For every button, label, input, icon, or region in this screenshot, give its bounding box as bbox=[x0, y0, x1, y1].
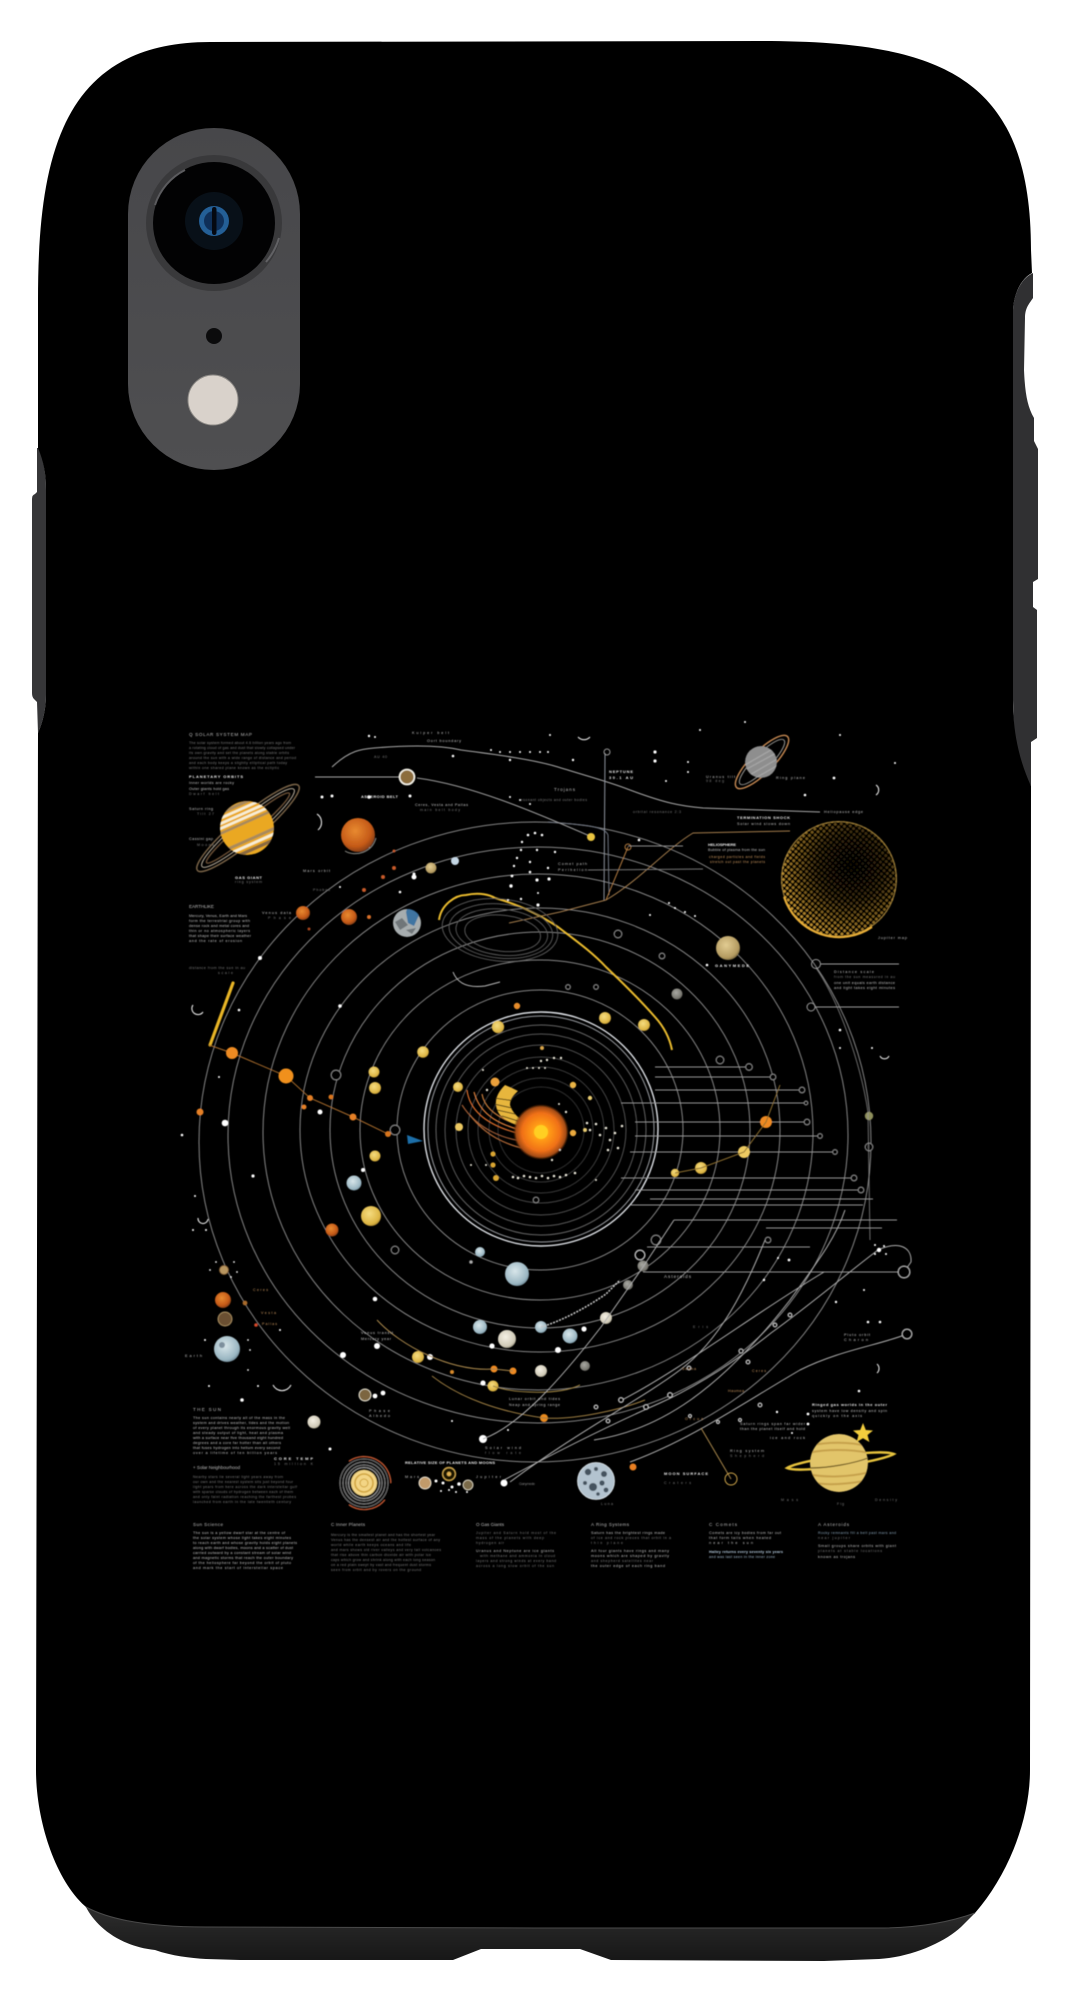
upper right block: GANYMEDE bbox=[715, 963, 749, 968]
lower left text block: + Solar Neighbourhood bbox=[193, 1465, 240, 1470]
bottom column 5 bbox=[709, 1522, 783, 1559]
lower labels bbox=[185, 1274, 897, 1506]
top centre labels: Uranus tilt bbox=[706, 775, 736, 779]
intro paragraph: within one shared plane known as the ecliptic bbox=[189, 766, 279, 770]
lower labels: Orcus bbox=[685, 1417, 703, 1421]
large halftone planet bbox=[780, 820, 898, 940]
lower labels: Lunar orbit and tides bbox=[509, 1397, 560, 1401]
top centre labels: orbital resonance 2:3 bbox=[633, 810, 681, 814]
lower left text block: THE SUN bbox=[193, 1407, 221, 1412]
lower labels: Sedna bbox=[682, 1367, 696, 1371]
bottom column 1: and mark the start of interstellar space bbox=[193, 1566, 283, 1570]
label: intro text block bbox=[189, 732, 296, 796]
solar core bbox=[534, 1125, 548, 1139]
lower labels: system have low density and spin bbox=[812, 1409, 887, 1413]
lower left text block: degrees and a core far hotter than all others bbox=[193, 1441, 281, 1445]
bottom column 3 bbox=[476, 1522, 556, 1568]
right callout block: Distance scale bbox=[834, 970, 874, 974]
bottom column 1: and magnetic storms that reach the outer boundary bbox=[193, 1556, 293, 1560]
side labels near gold planet: GAS GIANT bbox=[235, 875, 263, 880]
intro paragraph: around the sun with a wide range of distance and period bbox=[189, 756, 296, 760]
lower labels: Fig bbox=[837, 1502, 844, 1506]
bottom pale planet row bbox=[308, 1312, 636, 1470]
secondary paragraph: Dwarf belt bbox=[189, 792, 219, 796]
bottom column 5: C Comets bbox=[709, 1522, 738, 1527]
lower labels: than the planet itself and hold bbox=[740, 1427, 805, 1431]
yellow comet arc bbox=[439, 894, 672, 1050]
lower left text block: and only faint radiation reaching the farthest probes bbox=[193, 1495, 296, 1499]
lower labels: Mass bbox=[781, 1498, 798, 1502]
lower labels: Venus transit bbox=[361, 1331, 394, 1335]
lower left text block: launched from earth in the late twentieth century bbox=[193, 1500, 291, 1504]
lower left text block: our own and the nearest system sits just beyond four bbox=[193, 1480, 294, 1484]
secondary paragraph: PLANETARY ORBITS bbox=[189, 774, 243, 779]
intro paragraph bbox=[189, 741, 296, 770]
lower labels: quickly on the axis bbox=[812, 1414, 862, 1418]
lower left text block bbox=[193, 1407, 314, 1504]
lower left text block: Nearby stars lie several light years away from bbox=[193, 1475, 283, 1479]
lower left text block: over a lifetime of ten billion years bbox=[193, 1451, 277, 1455]
camera pill housing bbox=[128, 128, 300, 470]
grey-olive worlds bbox=[326, 988, 873, 1290]
lower left text block: system and drives weather, tides and the motion bbox=[193, 1421, 289, 1425]
intro paragraph: The solar system formed about 4.6 billion years ago from bbox=[189, 741, 291, 745]
top centre labels: Heliopause edge bbox=[824, 810, 863, 814]
bottom column 4: Saturn has the brightest rings made bbox=[591, 1531, 665, 1535]
sweeping top curve bbox=[332, 746, 820, 812]
bottom column 1: along with dwarf bodies, moons and a scatter of dust bbox=[193, 1546, 294, 1550]
right callout block bbox=[834, 970, 895, 990]
lower labels: Craters bbox=[664, 1481, 691, 1485]
right side buttons and strip bbox=[1013, 273, 1038, 786]
top centre labels: resonant objects and outer bodies bbox=[519, 798, 587, 802]
top centre labels: Oort boundary bbox=[427, 739, 461, 743]
lower labels: Saturn rings span far wider bbox=[740, 1422, 806, 1426]
bottom orbit highlights bbox=[377, 1280, 645, 1418]
lower left text block: and steady output of light, heat and plasma bbox=[193, 1431, 284, 1435]
lower labels: Phase bbox=[369, 1409, 390, 1413]
upper right block bbox=[558, 815, 907, 968]
bottom column 2: that rise above thin carbon dioxide air with polar ice bbox=[331, 1553, 431, 1557]
microphone hole bbox=[206, 328, 222, 344]
bottom column 4: A Ring Systems bbox=[591, 1522, 630, 1527]
ring callouts at right bbox=[807, 960, 899, 1240]
bottom column 1: to reach earth and whose gravity holds eight planets bbox=[193, 1541, 297, 1545]
bottom column 4: moons which are shaped by gravity bbox=[591, 1554, 669, 1558]
lower labels: Eris bbox=[693, 1325, 708, 1329]
bottom column 2: and mars shows old river valleys and very tall volcanoes bbox=[331, 1548, 441, 1552]
second left text block bbox=[189, 904, 292, 975]
bottom column 3: Jupiter and Saturn hold most of the bbox=[476, 1531, 556, 1535]
second left text block: distance from the sun in au bbox=[189, 966, 245, 970]
upper right block: Solar wind slows down bbox=[737, 822, 790, 826]
dotted constellation cloud bbox=[490, 749, 696, 917]
crescent moons bbox=[192, 737, 889, 1391]
yellow worlds on inner orbits bbox=[361, 833, 772, 1226]
top centre labels: 98 deg bbox=[706, 779, 724, 783]
intro paragraph: its own gravity and set the planets along stable orbits bbox=[189, 751, 289, 755]
curved arrow bbox=[453, 972, 500, 987]
bottom column 1: carried outward by a constant stream of solar wind bbox=[193, 1551, 291, 1555]
bottom column 2: Venus has the densest air and the hottest surface of any bbox=[331, 1538, 440, 1542]
swirling orange comet tail bbox=[462, 1090, 535, 1150]
mini diagram caption: Jupiter bbox=[476, 1475, 502, 1479]
intro paragraph: a rotating cloud of gas and dust that slowly collapsed under bbox=[189, 746, 296, 750]
left gold bar bbox=[210, 983, 233, 1045]
lower labels: Earth bbox=[185, 1354, 202, 1358]
orbit rings bbox=[199, 822, 871, 1462]
second left text block: and the rate of erosion bbox=[189, 939, 242, 943]
upper right block: stretch out past the planets bbox=[710, 860, 765, 864]
bottom column 4: and shepherd satellites near bbox=[591, 1559, 654, 1563]
side labels near gold planet: Moons bbox=[197, 843, 214, 847]
bottom column 4 bbox=[591, 1522, 671, 1568]
side labels near gold planet: Phobos bbox=[313, 888, 330, 892]
lower left text block: with a surface near five thousand eight hundred bbox=[193, 1436, 283, 1440]
mini diagram caption: RELATIVE SIZE OF PLANETS AND MOONS bbox=[405, 1460, 495, 1465]
lower labels: Ringed gas worlds in the outer bbox=[812, 1402, 887, 1407]
second left text block: that shape their surface weather bbox=[189, 934, 252, 938]
secondary paragraph: Outer giants hold gas bbox=[189, 787, 229, 791]
corona bbox=[513, 1104, 569, 1160]
full moon bbox=[578, 1462, 614, 1500]
intro heading: Q SOLAR SYSTEM MAP bbox=[189, 732, 252, 737]
horizontal data lines at right of the rings bbox=[621, 1067, 902, 1272]
lower labels: flow rate bbox=[485, 1451, 521, 1455]
small rings along trajectories bbox=[594, 1250, 792, 1424]
main lens bbox=[146, 155, 282, 291]
bottom column 3: Uranus and Neptune are ice giants bbox=[476, 1549, 554, 1553]
upper right block: charged particles and fields bbox=[709, 855, 765, 859]
side labels near gold planet: Saturn ring bbox=[189, 807, 213, 811]
top centre labels: Ceres, Vesta and Pallas bbox=[415, 803, 468, 807]
upper right block: HELIOSPHERE bbox=[708, 842, 736, 847]
mini diagram caption bbox=[405, 1460, 535, 1486]
big gold ringed planet bbox=[195, 783, 301, 873]
second left text block: EARTHLIKE bbox=[189, 904, 214, 909]
upper right block: Bubble of plasma from the sun bbox=[708, 848, 765, 852]
bottom column 6: known as trojans bbox=[818, 1555, 855, 1559]
blue marker bbox=[407, 1135, 423, 1144]
upper right block: Comet path bbox=[558, 862, 587, 866]
bottom column 1: The sun is a yellow dwarf star at the centre of bbox=[193, 1531, 286, 1535]
lower left text block: that fuses hydrogen into helium every second bbox=[193, 1446, 280, 1450]
bottom column 2: caps which grow and shrink along with each long season bbox=[331, 1558, 435, 1562]
top centre labels: AU 40 bbox=[374, 755, 387, 759]
scattered stars and dots bbox=[181, 721, 896, 1486]
right callout block: from the sun measured in au bbox=[834, 975, 895, 979]
lower labels: Shepherd bbox=[730, 1454, 764, 1458]
bottom column 2: on a red plain swept by vast and frequent dust storms bbox=[331, 1563, 431, 1567]
lower left text block: light years from here across the dark interstellar gulf bbox=[193, 1485, 297, 1489]
top centre labels: Ring plane bbox=[776, 776, 805, 780]
vertical pointer and diagonal leaders bbox=[315, 749, 790, 923]
top centre labels: ASTEROID BELT bbox=[361, 794, 399, 799]
bottom column 1: of the heliosphere far beyond the orbit of pluto bbox=[193, 1561, 291, 1565]
bottom column 6: near jupiter bbox=[818, 1536, 851, 1540]
tan moon bbox=[716, 936, 740, 960]
left planet stack bbox=[209, 1261, 258, 1371]
star bbox=[853, 1423, 873, 1442]
lower labels: MOON SURFACE bbox=[664, 1471, 708, 1476]
chain link through right planets bbox=[675, 1085, 780, 1173]
second left text block: thin or no atmospheric layers bbox=[189, 929, 250, 933]
second left text block: Mercury, Venus, Earth and Mars bbox=[189, 914, 247, 918]
bottom column 6: Small groups share orbits with giant bbox=[818, 1544, 897, 1548]
upper right block: TERMINATION SHOCK bbox=[737, 815, 790, 820]
ringed grey planet bbox=[734, 734, 790, 790]
side labels near gold planet: ring system bbox=[235, 880, 262, 884]
top centre labels: Kuiper belt bbox=[412, 731, 450, 735]
second left text block: Venus data bbox=[262, 911, 292, 915]
bottom column 3: with methane and ammonia in cloud bbox=[480, 1554, 555, 1558]
bottom column 1 bbox=[193, 1522, 297, 1570]
bottom column 2: C Inner Planets bbox=[331, 1522, 366, 1527]
bottom column 1: Sun Science bbox=[193, 1522, 223, 1527]
bottom column 2: Mercury is the smallest planet and has the shortest year bbox=[331, 1533, 436, 1537]
lower left text block: The sun contains nearly all of the mass in the bbox=[193, 1416, 285, 1420]
second left text block: scale bbox=[218, 971, 233, 975]
intro paragraph: and each body keeps a slightly elliptical path today bbox=[189, 761, 287, 765]
white flare at end of line bbox=[874, 1244, 887, 1255]
bottom column 3: mass of the planets with deep bbox=[476, 1536, 544, 1540]
bottom column 5: Comets are icy bodies from far out bbox=[709, 1531, 782, 1535]
mini diagram caption: Ganymede bbox=[519, 1482, 535, 1486]
lower left text block: with sparse clouds of hydrogen between each of them bbox=[193, 1490, 293, 1494]
lower left text block: of every planet through its enormous gravity well bbox=[193, 1426, 290, 1430]
ringed sun diagram bbox=[337, 1456, 391, 1510]
orange node chain bbox=[196, 1045, 391, 1137]
lower labels: Pallas bbox=[262, 1322, 277, 1326]
small rings on data lines bbox=[331, 930, 873, 1254]
bottom column 3: hydrogen air bbox=[476, 1541, 505, 1545]
lower left text block: CORE TEMP bbox=[274, 1456, 313, 1461]
top centre labels: NEPTUNE bbox=[609, 769, 633, 774]
lower labels: Vesta bbox=[261, 1311, 276, 1315]
planet cluster upper left arc bbox=[296, 850, 459, 930]
bottom column 6: Rocky remnants fill a belt past mars and bbox=[818, 1531, 896, 1535]
bottom column 5: Halley returns every seventy six years bbox=[709, 1550, 783, 1554]
bottom column 5: that form tails when heated bbox=[709, 1536, 771, 1540]
bottom column 6 bbox=[818, 1522, 897, 1559]
bottom column 5: and was last seen in the inner zone bbox=[709, 1555, 775, 1559]
bottom column 3: across a long slow orbit of the sun bbox=[476, 1564, 554, 1568]
long diagonal trajectories bbox=[483, 1210, 912, 1485]
lip highlight bbox=[86, 1907, 975, 1928]
secondary paragraph bbox=[189, 774, 243, 796]
bottom column 4: the outer edge of each ring band bbox=[591, 1564, 665, 1568]
lower labels: Neap and spring range bbox=[509, 1403, 560, 1407]
bottom column 1: the solar system whose light takes eight minutes bbox=[193, 1536, 291, 1540]
upper right block: Perihelion bbox=[558, 868, 587, 872]
side labels near gold planet bbox=[189, 807, 331, 892]
top centre labels: 30.1 AU bbox=[609, 775, 633, 780]
ringed yellow planet with star bbox=[787, 1423, 894, 1492]
lower labels: Luna bbox=[601, 1502, 613, 1506]
grey-blue planet bbox=[393, 909, 421, 937]
lower labels: Ring system bbox=[730, 1449, 764, 1453]
bottom column 3: O Gas Giants bbox=[476, 1522, 505, 1527]
spiral rings near comet bbox=[439, 893, 561, 967]
bottom column 2 bbox=[331, 1522, 441, 1572]
second left text block: Phase bbox=[268, 916, 291, 920]
lower labels: Ceres bbox=[752, 1369, 766, 1373]
top centre labels bbox=[361, 731, 863, 814]
lower labels: Solar wind bbox=[485, 1446, 521, 1450]
lower labels: ice and rock bbox=[770, 1436, 805, 1440]
mini diagram caption: Mars bbox=[405, 1475, 419, 1479]
top centre labels: main belt body bbox=[420, 808, 460, 812]
solar system artwork bbox=[181, 721, 912, 1572]
bottom column 2: seen from orbit and by rovers on the ground bbox=[331, 1568, 421, 1572]
lower left text block: 15 million K bbox=[274, 1462, 314, 1466]
mini orbit diagram bbox=[419, 1468, 473, 1493]
top centre labels: Trojans bbox=[554, 787, 576, 792]
left side button strip bbox=[32, 448, 46, 733]
sun bbox=[462, 1085, 569, 1160]
lower labels: Ceres bbox=[253, 1288, 268, 1292]
orange planet bbox=[341, 818, 376, 854]
upper right block: Jupiter map bbox=[878, 936, 907, 940]
lower labels: Mercury year bbox=[361, 1337, 392, 1341]
lower labels: Charon bbox=[844, 1338, 868, 1342]
second left text block: dense rock and metal cores and bbox=[189, 924, 249, 928]
lower labels: Pluto orbit bbox=[844, 1333, 871, 1337]
lower labels: Density bbox=[875, 1498, 897, 1502]
small sun-system dots bbox=[470, 1057, 623, 1181]
lower labels: Albedo bbox=[369, 1414, 390, 1418]
small ring planet top bbox=[400, 770, 414, 784]
lower labels: Haumea bbox=[728, 1389, 744, 1393]
bottom column 4: thin plane bbox=[591, 1541, 623, 1545]
bottom column 3: layers and strong winds at every band bbox=[476, 1559, 556, 1563]
bottom lip of the case bbox=[86, 1907, 975, 1961]
bottom column 6: A Asteroids bbox=[818, 1522, 850, 1527]
right callout block: and light takes eight minutes bbox=[834, 986, 895, 990]
side labels near gold planet: Mars orbit bbox=[303, 869, 331, 873]
second left text block: form the terrestrial group with bbox=[189, 919, 250, 923]
side labels near gold planet: Tilt 27 bbox=[197, 812, 214, 816]
lower labels: Asteroids bbox=[664, 1274, 692, 1279]
bottom column 5: near the sun bbox=[709, 1541, 753, 1545]
bottom column 6: planets at stable locations bbox=[818, 1549, 882, 1553]
right callout block: one unit equals earth distance bbox=[834, 981, 895, 985]
side labels near gold planet: Cassini gap bbox=[189, 837, 213, 841]
camera module bbox=[128, 128, 300, 470]
bottom column 2: world while earth keeps oceans and life bbox=[331, 1543, 411, 1547]
bottom column 4: of ice and rock pieces that orbit in a bbox=[591, 1536, 671, 1540]
secondary paragraph: Inner worlds are rocky bbox=[189, 781, 234, 785]
bottom column 4: All four giants have rings and many bbox=[591, 1549, 669, 1553]
yellow striped arc bbox=[496, 1085, 526, 1127]
flash bbox=[188, 375, 238, 425]
